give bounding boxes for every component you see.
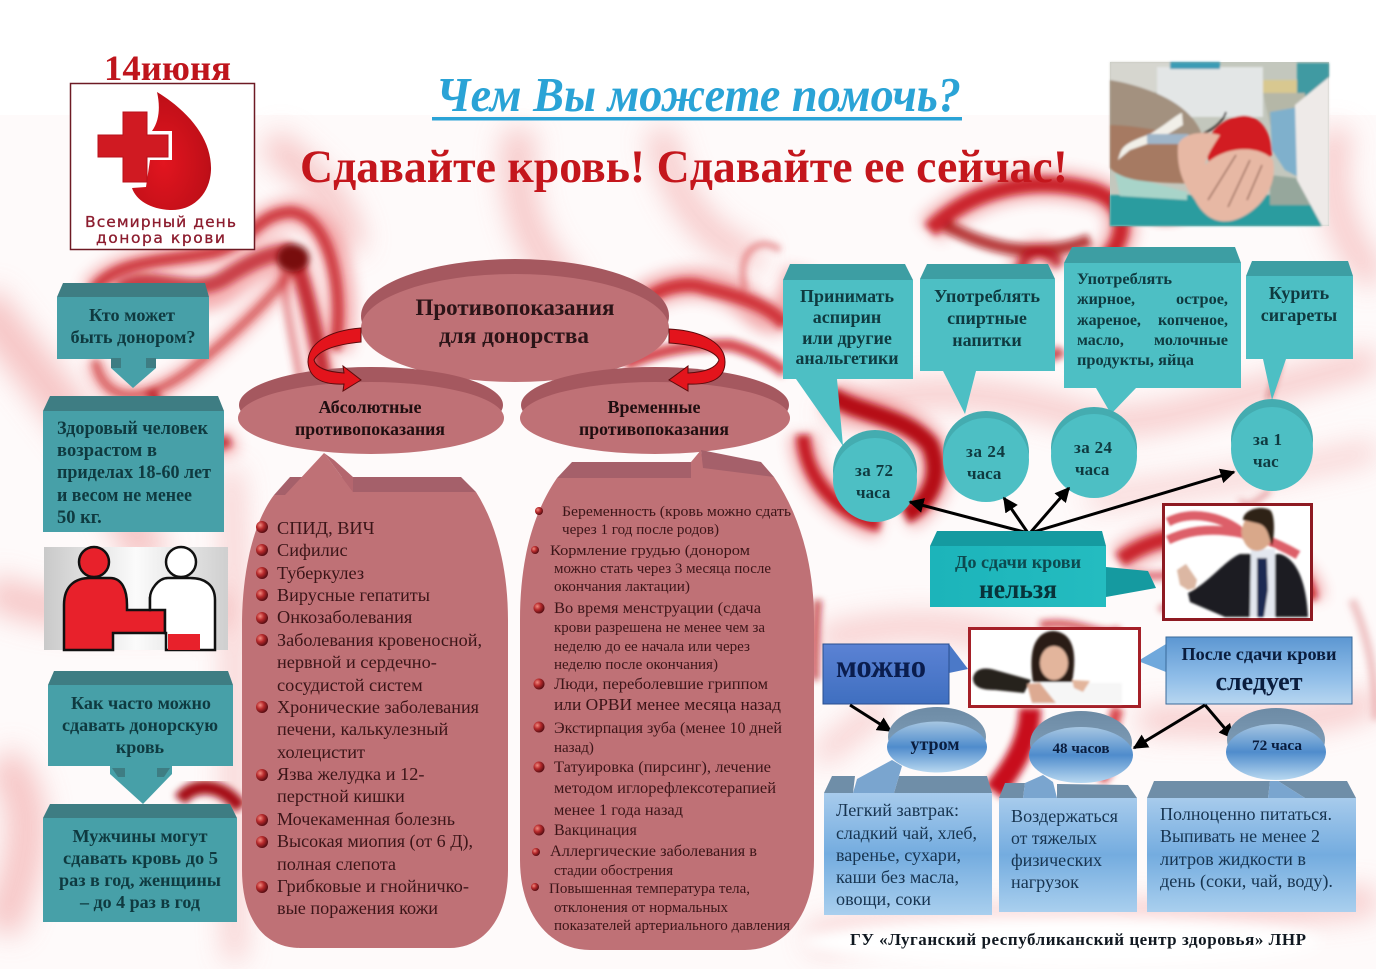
- footer: organisation: ГУ «Луганский республиканский центр здоровья» ЛНР: [850, 930, 1306, 949]
- panel: healthy person answer: Здоровый человек: [57, 419, 208, 439]
- oval: main contraindications heading: [361, 259, 669, 382]
- photo: hand squeezing heart during donation: [1110, 62, 1329, 226]
- oval: main contraindications heading: для донорства: [439, 323, 589, 348]
- title: Чем Вы можете помочь?: [436, 67, 961, 122]
- oval: absolute: [238, 367, 504, 454]
- panel: morning light breakfast: Легкий завтрак:: [836, 800, 959, 820]
- arrow: to absolute contraindications: [308, 328, 361, 391]
- callout: after donation should: следует: [1216, 667, 1303, 696]
- list text: Повышенная температура тела,: [549, 881, 750, 897]
- list text: перстной кишки: [277, 786, 405, 806]
- callout: cigarettes: Курить: [1269, 283, 1330, 303]
- list text: Грибковые и гнойничко-: [277, 876, 469, 896]
- subtitle: Сдавайте кровь! Сдавайте ее сейчас!: [300, 141, 1068, 193]
- list text: Экстирпация зуба (менее 10 дней: [554, 720, 782, 737]
- callout: alcohol: спиртные: [947, 308, 1027, 328]
- oval: 72 hours: [1226, 708, 1326, 780]
- callout: alcohol: напитки: [952, 330, 1022, 350]
- arrows: from forbidden box to circles: [910, 472, 1234, 533]
- callout: fatty food: масло,: [1077, 332, 1124, 349]
- list text: Кормление грудью (донором: [550, 543, 751, 559]
- list text: сосудистой систем: [277, 675, 423, 695]
- list text: показателей артериального давления: [554, 918, 790, 934]
- list text: методом иглорефлексотерапией: [554, 780, 776, 797]
- circle: 24 hours second: часа: [1075, 460, 1110, 479]
- callout: aspirin: анальгетики: [796, 348, 898, 368]
- oval: morning: [887, 707, 987, 772]
- panel: eat fully: литров жидкости в: [1160, 849, 1306, 869]
- list text: можно стать через 3 месяца после: [554, 561, 771, 577]
- list text: Язва желудка и 12-: [277, 764, 424, 784]
- callout: aspirin: Принимать: [800, 286, 894, 306]
- list text: Вакцинация: [554, 822, 637, 839]
- list text: нервной и сердечно-: [277, 652, 437, 672]
- callout: allowed: можно: [836, 648, 926, 684]
- list text: окончания лактации): [554, 579, 690, 595]
- panel: healthy person answer: и весом не менее: [57, 486, 192, 506]
- left column: [43, 283, 237, 922]
- panel: avoid heavy physical load: [999, 775, 1137, 912]
- list text: Мочекаменная болезнь: [277, 809, 455, 829]
- list text: крови разрешена не менее чем за: [554, 620, 765, 636]
- callout: cigarettes: [1246, 261, 1353, 400]
- list text: Онкозаболевания: [277, 607, 413, 627]
- icon: blood drop: [132, 92, 211, 210]
- circle: 72 hours: [833, 430, 917, 522]
- after donation section: [823, 628, 1356, 915]
- panel: morning light breakfast: варенье, сухари,: [836, 845, 961, 865]
- panel: men and women frequency: раз в год, женщины: [59, 870, 221, 890]
- callout: before donation forbidden: До сдачи крови: [955, 552, 1081, 572]
- list text: Татуировка (пирсинг), лечение: [554, 759, 771, 776]
- list text: Во время менструации (сдача: [554, 600, 761, 617]
- circle: 24 hours second: [1051, 407, 1137, 498]
- panel: how often: сдавать донорскую: [62, 715, 218, 735]
- photo: woman pointing: [970, 628, 1140, 706]
- list text: стадии обострения: [554, 863, 673, 879]
- left swirl: [92, 212, 338, 446]
- circle: 24 hours: часа: [967, 464, 1002, 483]
- logo: World Blood Donor Day: [70, 84, 254, 250]
- circle: 1 hour: [1231, 399, 1313, 491]
- list text: неделю после окончания): [554, 657, 718, 673]
- left swirl soft halo: [92, 212, 342, 446]
- list text: через 1 год после родов): [562, 522, 719, 538]
- list text: неделю до ее начала или через: [554, 639, 750, 655]
- circle: 1 hour: час: [1253, 452, 1279, 471]
- list text: вые поражения кожи: [277, 898, 438, 918]
- panel: men and women frequency: сдавать кровь до 5: [63, 848, 218, 868]
- icon: red cross: [98, 112, 168, 182]
- list text: Туберкулез: [277, 563, 364, 583]
- panel: morning light breakfast: овощи, соки: [836, 889, 931, 909]
- list text: менее 1 года назад: [554, 802, 683, 819]
- callout: after donation should: [1138, 637, 1352, 704]
- list text: Аллергические заболевания в: [550, 843, 757, 860]
- panel: who can be a donor: [57, 283, 209, 388]
- panel: avoid heavy physical load: от тяжелых: [1011, 828, 1097, 848]
- panel: morning light breakfast: [824, 760, 992, 915]
- list text: Вирусные гепатиты: [277, 585, 430, 605]
- list text: холецистит: [277, 742, 365, 762]
- oval: main contraindications heading: Противопоказания: [416, 295, 614, 320]
- logo caption: донора крови: [96, 229, 225, 247]
- panel: who can be a donor: быть донором?: [70, 327, 196, 347]
- panel: eat fully: день (соки, чай, воду).: [1160, 871, 1333, 892]
- panel: morning light breakfast: каши без масла,: [836, 867, 959, 887]
- callout: alcohol: Употреблять: [934, 286, 1040, 306]
- contraindications diagram: [238, 259, 814, 950]
- logo caption: [85, 213, 236, 247]
- list text: Высокая миопия (от 6 Д),: [277, 831, 473, 852]
- callout: after donation should: После сдачи крови: [1182, 644, 1336, 664]
- oval: temporary: [520, 367, 790, 454]
- panel: morning light breakfast: сладкий чай, хлеб,: [836, 823, 977, 843]
- panel: who can be a donor: Кто может: [89, 305, 175, 325]
- callout: before donation forbidden: нельзя: [979, 574, 1057, 604]
- oval: 72 hours: 72 часа: [1252, 738, 1302, 754]
- callout: aspirin: или другие: [802, 328, 892, 348]
- circle: 72 hours: за 72: [855, 461, 893, 480]
- panel: how often: [48, 671, 233, 804]
- callout: alcohol: [920, 264, 1055, 414]
- panel: how often: кровь: [116, 737, 165, 757]
- callout: fatty food: копченое,: [1158, 312, 1228, 329]
- oval: morning: утром: [910, 734, 960, 754]
- list text: Беременность (кровь можно сдать: [562, 504, 791, 520]
- centre and right swirls: [625, 184, 1376, 792]
- callout: allowed: [823, 644, 968, 704]
- oval: 48 hours: 48 часов: [1052, 741, 1110, 757]
- panel: healthy person answer: [43, 396, 224, 532]
- bullets: [256, 521, 268, 893]
- panel: avoid heavy physical load: нагрузок: [1011, 872, 1079, 892]
- panel: eat fully: [1147, 781, 1356, 912]
- date heading: 14июня: [104, 48, 231, 88]
- list text: Люди, переболевшие гриппом: [554, 676, 768, 693]
- list text: печени, калькулезный: [277, 719, 449, 739]
- callout: fatty food: [1064, 247, 1241, 414]
- list text: или ОРВИ менее месяца назад: [554, 695, 781, 714]
- list text: Заболевания кровеносной,: [277, 630, 482, 650]
- list text: отклонения от нормальных: [554, 900, 728, 916]
- panel: eat fully: Выпивать не менее 2: [1160, 826, 1320, 846]
- panel: how often: Как часто можно: [71, 693, 211, 713]
- panel: healthy person answer: возрастом в: [57, 441, 157, 461]
- oval: absolute: противопоказания: [295, 419, 445, 439]
- callout: fatty food: Употреблять: [1077, 271, 1173, 288]
- panel: men and women frequency: [43, 804, 237, 922]
- oval: temporary: противопоказания: [579, 419, 729, 439]
- callout: fatty food: жирное,: [1077, 291, 1135, 308]
- bullets: [531, 507, 544, 891]
- logo caption: Всемирный день: [85, 213, 236, 231]
- circle: 72 hours: часа: [856, 483, 891, 502]
- panel: avoid heavy physical load: физических: [1011, 850, 1102, 870]
- list text: полная слепота: [277, 854, 396, 874]
- callout: cigarettes: сигареты: [1261, 305, 1337, 325]
- arrow: to temporary contraindications: [669, 329, 725, 391]
- list text: [549, 504, 791, 934]
- panel: temporary list: [520, 450, 814, 950]
- callout: aspirin: [783, 264, 913, 446]
- panel: men and women frequency: Мужчины могут: [72, 826, 208, 846]
- oval: temporary: Временные: [608, 397, 701, 417]
- time circles: [833, 399, 1313, 522]
- callout: fatty food: продукты, яйца: [1077, 352, 1194, 369]
- oval: 48 hours: [1029, 711, 1133, 783]
- panel: eat fully: Полноценно питаться.: [1160, 804, 1332, 824]
- list text: [277, 518, 482, 918]
- panel: healthy person answer: приделах 18-60 лет: [57, 463, 211, 483]
- panel: avoid heavy physical load: Воздержаться: [1011, 806, 1118, 826]
- before donation section: [783, 247, 1353, 620]
- circle: 24 hours: за 24: [966, 442, 1006, 461]
- list text: назад): [554, 740, 594, 756]
- callout: aspirin: аспирин: [813, 307, 881, 327]
- photo: man in suit pointing: [1164, 504, 1312, 620]
- panel: men and women frequency: – до 4 раз в год: [79, 892, 200, 912]
- arrows: to moments: [850, 705, 1233, 748]
- list text: Сифилис: [277, 540, 348, 560]
- list text: СПИД, ВИЧ: [277, 518, 375, 538]
- callout: fatty food: жареное,: [1077, 312, 1141, 329]
- icon: two people holding hands: [44, 547, 228, 650]
- circle: 1 hour: за 1: [1253, 430, 1282, 449]
- callout: fatty food: молочные: [1154, 332, 1228, 349]
- list text: Хронические заболевания: [277, 697, 480, 717]
- panel: healthy person answer: 50 кг.: [57, 508, 102, 528]
- callout: fatty food: острое,: [1176, 291, 1228, 308]
- oval: absolute: Абсолютные: [318, 397, 422, 417]
- callout: before donation forbidden: [930, 531, 1156, 607]
- circle: 24 hours second: за 24: [1074, 438, 1112, 457]
- panel: absolute list: [242, 453, 508, 948]
- circle: 24 hours: [943, 411, 1029, 502]
- centre and right swirls halo: [640, 184, 1310, 600]
